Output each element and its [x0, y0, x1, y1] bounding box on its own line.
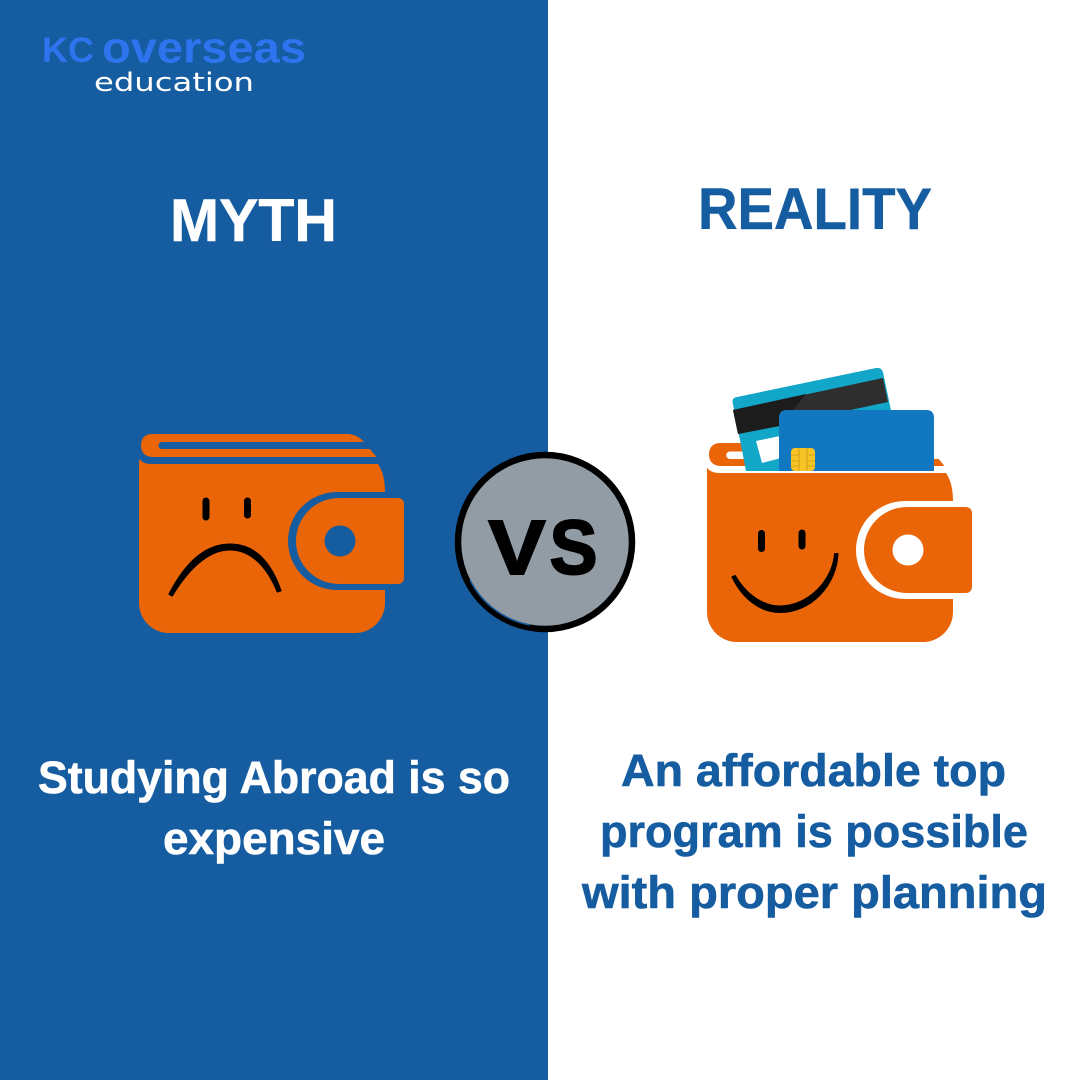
icon: sad wallet	[139, 434, 410, 633]
logo: KC overseas education	[42, 24, 306, 98]
text block: reality statement	[581, 745, 1047, 918]
icon: happy wallet with cards	[707, 368, 978, 642]
back card	[732, 368, 893, 471]
badge: VS	[458, 455, 632, 629]
text block: reality statement: with proper planning	[581, 867, 1047, 918]
sad face	[170, 498, 280, 596]
card chip	[791, 448, 815, 471]
panel: myth background	[0, 0, 548, 1080]
text block: reality statement: An affordable top	[621, 745, 1006, 796]
wallet flap	[709, 443, 944, 466]
panel: reality background	[548, 0, 1080, 1080]
clasp	[864, 507, 972, 593]
happy face	[732, 530, 838, 612]
logo: KC overseas education: overseas	[102, 24, 306, 72]
clasp outline	[856, 501, 978, 599]
heading: REALITY: REALITY	[698, 177, 932, 242]
text block: reality statement: program is possible	[600, 806, 1028, 857]
logo: KC overseas education: education	[94, 68, 254, 98]
front card	[779, 410, 934, 471]
logo: KC overseas education: KC	[42, 31, 94, 70]
wallet slot	[726, 452, 950, 459]
text block: myth statement	[38, 752, 510, 864]
clasp outline	[288, 492, 410, 590]
clasp button	[324, 526, 356, 556]
text block: myth statement: expensive	[163, 813, 385, 864]
wallet slot	[159, 442, 380, 449]
clasp button	[892, 534, 924, 566]
clasp	[296, 498, 404, 584]
heading: MYTH: MYTH	[170, 187, 337, 254]
wallet flap	[141, 434, 376, 457]
text block: myth statement: Studying Abroad is so	[38, 752, 510, 803]
wallet body	[139, 459, 385, 633]
badge: VS: S	[550, 505, 598, 591]
badge: VS: V	[488, 505, 546, 591]
wallet body	[707, 468, 953, 642]
